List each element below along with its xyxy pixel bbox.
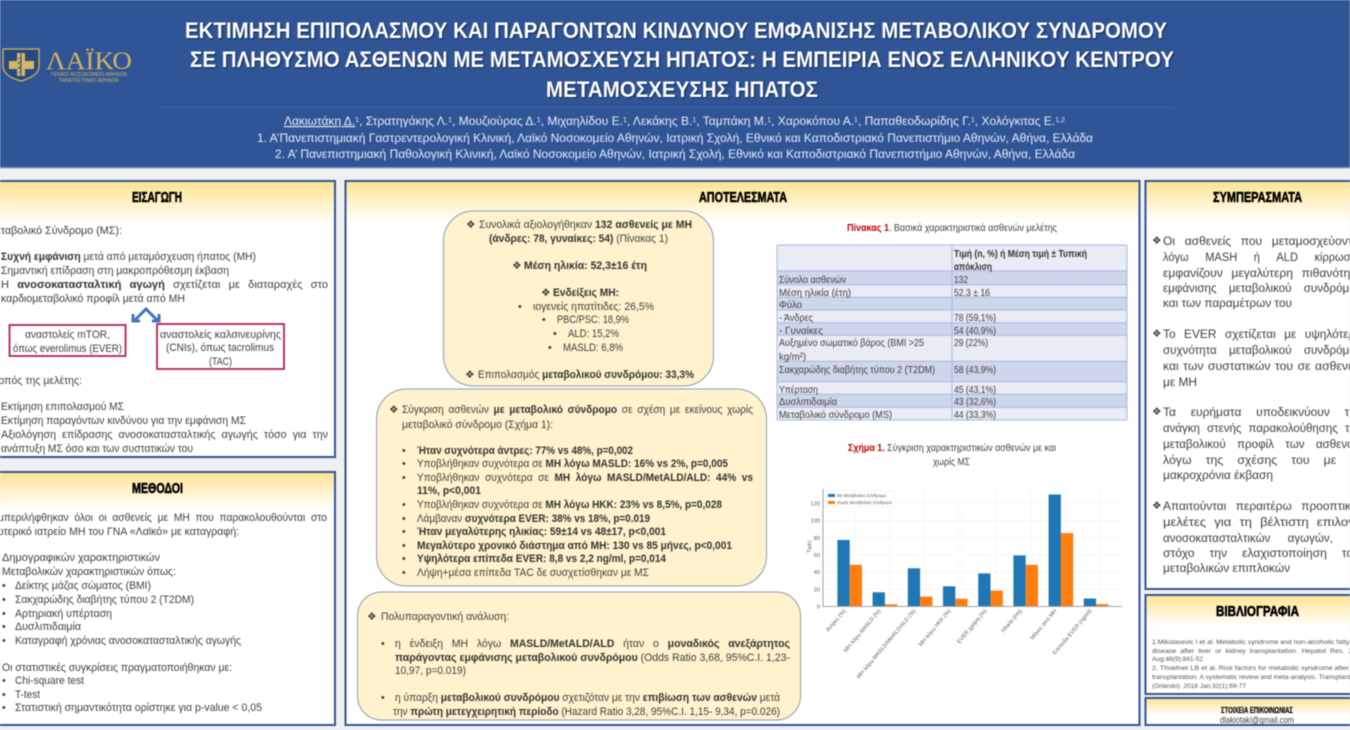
x axis labels: Ηλικία (έτη)	[1000, 608, 1024, 634]
x axis labels: ΜΗ λόγω MASLD (%)	[842, 608, 883, 654]
callout: overall cohort: (άνδρες: 78, γυναίκες: 54) (Πίνακας 1)	[489, 233, 668, 245]
list: statistics: Οι στατιστικές συγκρίσεις πραγματοποιήθηκαν με:	[2, 662, 232, 674]
table row labels: Μεταβολικό σύνδρομο (MS)	[779, 409, 892, 421]
chart axes	[823, 489, 1122, 606]
heading: contact: ΣΤΟΙΧΕΙΑ ΕΠΙΚΟΙΝΩΝΙΑΣ	[1221, 706, 1293, 715]
callout: overall cohort: •	[553, 328, 557, 340]
logo: Laiko hospital	[3, 48, 132, 84]
callout: comparison with and without MS: •	[402, 526, 406, 538]
title	[185, 18, 1174, 102]
logo subtitle: ΓΕΝΙΚΟ ΝΟΣΟΚΟΜΕΙΟ ΑΘΗΝΩΝ	[51, 72, 127, 78]
callout: multivariate analysis: •	[381, 692, 385, 704]
text: metabolic syndrome: Η ανοσοκατασταλτική αγωγή σχετίζεται με διαταραχές στο	[1, 279, 328, 291]
callout: comparison with and without MS: Ήταν συχνότερα άντρες: 77% vs 48%, p=0,002	[417, 445, 633, 457]
references: Aug;46(9):841-52	[1152, 656, 1203, 663]
conclusion 2: ❖	[1152, 328, 1162, 340]
title: ΣΕ ΠΛΗΘΥΣΜΟ ΑΣΘΕΝΩΝ ΜΕ ΜΕΤΑΜΟΣΧΕΥΣΗ ΗΠΑΤΟΣ: Η ΕΜΠΕΙΡΙΑ ΕΝΟΣ ΕΛΛΗΝΙΚΟΥ ΚΕΝΤΡΟΥ	[190, 47, 1174, 72]
callout: overall cohort: Επιπολασμός μεταβολικού συνδρόμου: 33,3%	[478, 369, 694, 381]
box: calcineurin inhibitors: αναστολείς καλσινευρίνης	[160, 329, 281, 341]
panel: conclusions	[1146, 181, 1350, 589]
references: 1.Mikolasevic I et al. Metabolic syndrome and non-alcoholic fatty liver	[1152, 639, 1350, 646]
logo wordmark: ΛΑΪΚΟ	[46, 48, 132, 75]
callout: overall cohort: •	[518, 301, 522, 313]
box: mTOR inhibitors	[10, 325, 126, 356]
x axis labels: ΜΗ λόγω MASLD/MetALD/ALD (%)	[855, 608, 918, 680]
y axis ticks: 120	[811, 502, 820, 508]
heading: conclusions: ΣΥΜΠΕΡΑΣΜΑΤΑ	[1213, 189, 1302, 206]
conclusion 2: με ΜΗ	[1163, 377, 1197, 389]
conclusion 1	[1152, 235, 1350, 310]
title: ΕΚΤΙΜΗΣΗ ΕΠΙΠΟΛΑΣΜΟΥ ΚΑΙ ΠΑΡΑΓΟΝΤΩΝ ΚΙΝΔΥΝΟΥ ΕΜΦΑΝΙΣΗΣ ΜΕΤΑΒΟΛΙΚΟΥ ΣΥΝΔΡΟΜΟΥ	[185, 18, 1167, 43]
callout: overall cohort: ❖	[465, 369, 475, 381]
table values: 78 (59,1%)	[954, 313, 996, 324]
list: metabolic characteristics: Δυσλιπιδαιμία	[15, 621, 81, 633]
conclusion 3: Τα ευρήματα υποδεικνύουν την	[1163, 407, 1350, 419]
callout: comparison with and without MS: •	[402, 445, 406, 457]
table header: απόκλιση	[954, 262, 992, 273]
conclusion 2	[1152, 328, 1350, 389]
conclusion 1: εμφανίζουν μεγαλύτερη πιθανότητα	[1163, 268, 1350, 280]
text: study aim: ανάπτυξη ΜΣ όσο και των συστατικών του	[1, 443, 193, 455]
contact email: dlakiotaki@gmail.com	[1220, 715, 1294, 725]
box: calcineurin inhibitors: (TAC)	[209, 356, 232, 368]
table values: 132	[954, 275, 968, 286]
logo subtitle	[51, 72, 127, 84]
callout: overall cohort: Συνολικά αξιολογήθηκαν 132 ασθενείς με ΜΗ	[479, 219, 692, 231]
table header	[954, 249, 1087, 273]
figure title: χωρίς ΜΣ	[933, 456, 970, 468]
x axis labels: Άντρες (%)	[825, 608, 848, 633]
table values: 29 (22%)	[954, 338, 988, 349]
box: mTOR inhibitors: όπως everolimus (EVER)	[13, 343, 122, 355]
text: inclusion: Δημογραφικών χαρακτηριστικών	[2, 552, 160, 564]
y axis ticks: 80	[814, 536, 820, 542]
list: metabolic characteristics: Αρτηριακή υπέρταση	[15, 608, 112, 620]
table values: 45 (43,1%)	[954, 385, 996, 396]
text: inclusion	[0, 512, 327, 578]
authors and affiliations: 1. Α’Πανεπιστημιακή Γαστρεντερολογική Κλινική, Λαϊκό Νοσοκομείο Αθηνών, Ιατρική Σχολή, Εθνικό και Καποδιστριακό Πανεπιστήμιο Αθηνών, Αθήνα, Ελλάδα	[257, 131, 1093, 145]
list: metabolic characteristics	[2, 580, 241, 647]
list: metabolic characteristics: •	[2, 594, 6, 606]
references: disease after liver or kidney transplantation. Hepatol Res. 2016	[1152, 648, 1350, 655]
conclusion 4: στόχο την ελαχιστοποίηση των	[1163, 548, 1350, 560]
bars: with metabolic syndrome	[837, 494, 1096, 606]
references	[1152, 639, 1350, 690]
bars: without metabolic syndrome	[850, 533, 1108, 606]
callout: overall cohort: ALD: 15,2%	[568, 328, 619, 340]
authors and affiliations	[257, 114, 1093, 161]
conclusion 1: ❖	[1152, 235, 1162, 247]
list: metabolic characteristics: Δείκτης μάζας σώματος (ΒΜΙ)	[15, 580, 151, 592]
callout: comparison with and without MS: 11%, p<0,001	[417, 485, 481, 497]
callout: overall cohort: Ενδείξεις ΜΗ:	[553, 287, 619, 299]
callout: overall cohort: PBC/PSC: 18,9%	[557, 314, 629, 326]
text: study aim: Εκτίμηση παραγόντων κινδύνου για την εμφάνιση ΜΣ	[1, 415, 246, 427]
list: statistics	[2, 662, 262, 714]
list: metabolic characteristics: Καταγραφή χρόνιας ανοσοκατασταλτικής αγωγής	[15, 635, 241, 647]
text: study aim	[0, 375, 328, 455]
callout: overall cohort: ιογενείς ηπατίτιδες: 26,5%	[533, 301, 654, 313]
x axis labels: EVER χρήση (%)	[956, 608, 989, 645]
callout: comparison with and without MS: Μεγαλύτερο χρονικό διάστημα από ΜΗ: 130 vs 85 μήνες, p<0,001	[417, 540, 732, 552]
text: metabolic syndrome: Σημαντική επίδραση στη μακροπρόθεσμη έκβαση	[1, 265, 229, 277]
table values: 58 (43,9%)	[954, 365, 996, 376]
conclusion 3: ❖	[1152, 406, 1162, 418]
conclusion 4: μεταβολικών επιπλοκών	[1163, 563, 1290, 575]
conclusion 2: Το EVER σχετίζεται με υψηλότερη	[1163, 329, 1350, 341]
callout: multivariate analysis: η ύπαρξη μεταβολικού συνδρόμου σχετιζόταν με την επιβίωση των ασθενών μετά	[395, 692, 780, 704]
callout: comparison with and without MS	[376, 389, 766, 586]
authors and affiliations: 2. Α’ Πανεπιστημιακή Παθολογική Κλινική, Λαϊκό Νοσοκομείο Αθηνών, Ιατρική Σχολή, Εθνικό και Καποδιστριακό Πανεπιστήμιο Αθηνών, Αθήνα, Ελλάδα	[275, 147, 1075, 161]
references: (Orlando). 2018 Jan;32(1):69-77	[1152, 683, 1246, 690]
table title: Πίνακας 1. Βασικά χαρακτηριστικά ασθενών μελέτης	[847, 222, 1057, 234]
x axis labels: Μήνες από ΜΗ	[1029, 608, 1059, 641]
callout: comparison with and without MS: •	[402, 499, 406, 511]
arrow: double chevron	[133, 309, 159, 321]
table row labels: Σύνολο ασθενών	[779, 274, 846, 286]
list: metabolic characteristics: •	[2, 621, 6, 633]
table header: Τιμή (n, %) ή Μέση τιμή ± Τυπική	[954, 249, 1087, 260]
table values: 52,3 ± 16	[954, 288, 990, 299]
list: statistics: •	[2, 675, 6, 687]
callout: overall cohort	[444, 211, 714, 386]
header banner	[0, 0, 1350, 168]
table row labels: Υπέρταση	[779, 384, 818, 396]
table row labels: Φύλο	[779, 299, 802, 311]
callout: comparison with and without MS: Ήταν μεγαλύτερης ηλικίας: 59±14 vs 48±17, p<0,001	[417, 526, 666, 538]
callout: comparison with and without MS: •	[402, 472, 406, 484]
text: metabolic syndrome: Συχνή εμφάνιση μετά από μεταμόσχευση ήπατος (ΜΗ)	[1, 251, 256, 263]
y axis ticks: 100	[811, 519, 820, 525]
conclusion 3	[1152, 406, 1350, 482]
y axis label: Τιμές	[806, 540, 813, 553]
text: metabolic syndrome: καρδιομεταβολικό προφίλ μετά από ΜΗ	[1, 293, 185, 305]
table row labels: - Άνδρες	[779, 313, 813, 324]
heading: introduction: ΕΙΣΑΓΩΓΗ	[132, 189, 182, 206]
chart legend: Χωρίς Μεταβολικό Σύνδρομο	[837, 500, 893, 505]
table values	[954, 275, 996, 421]
conclusion 4: μελέτες για τη βέλτιστη επιλογή	[1163, 517, 1350, 529]
chart legend	[826, 491, 895, 507]
table row labels: Μέση ηλικία (έτη)	[779, 287, 851, 299]
table row labels: kg/m²)	[779, 352, 806, 363]
callout: overall cohort: Μέση ηλικία: 52,3±16 έτη	[524, 260, 647, 272]
panel: bibliography	[1146, 595, 1350, 694]
callout: multivariate analysis: 10,97, p=0.019)	[395, 665, 466, 677]
table row labels: Αυξημένο σωματικό βάρος (BMI >25	[779, 337, 924, 349]
conclusion 4	[1152, 500, 1350, 575]
table values: 54 (40,9%)	[954, 326, 996, 337]
box: calcineurin inhibitors: (CNIs), όπως tacrolimus	[166, 342, 274, 354]
callout: multivariate analysis: Πολυπαραγοντική ανάλυση:	[381, 611, 509, 623]
icon: shield with cross	[3, 49, 39, 81]
panel: results	[346, 181, 1140, 725]
conclusion 4: ❖	[1152, 500, 1162, 512]
list: statistics: T-test	[15, 689, 40, 701]
callout: multivariate analysis: την πρώτη μετεγχειρητική περίοδο (Hazard Ratio 3,28, 95%C.I. 1,15- 9,34, p=0.026)	[393, 706, 780, 718]
y axis ticks: 60	[814, 553, 820, 559]
logo subtitle: ΠΑΝΕΠΙΣΤΗΜΙΟ ΑΘΗΝΩΝ	[59, 78, 119, 84]
conclusion 4: Απαιτούνται περαιτέρω προοπτικές	[1163, 501, 1350, 513]
callout: comparison with and without MS: Υποβλήθηκαν συχνότερα σε ΜΗ λόγω ΗΚΚ: 23% vs 8,5%, p=0,028	[417, 499, 722, 511]
callout: comparison with and without MS: •	[402, 567, 406, 579]
authors and affiliations: Λακιωτάκη Δ.1, Στρατηγάκης Λ.1, Μουζιούρας Δ.1, Μιχαηλίδου Ε.1, Λεκάκης Β.1, Ταμπάκη Μ.1, Χαροκόπου Α.1, Παπαθεοδωρίδης Γ.1, Χολόγκιτας Ε.1,2	[284, 114, 1065, 128]
callout: overall cohort: ❖	[541, 287, 551, 299]
table values: 44 (33,3%)	[954, 410, 996, 421]
list: metabolic characteristics: Σακχαρώδης διαβήτης τύπου 2 (T2DM)	[15, 594, 194, 606]
box: calcineurin inhibitors	[157, 324, 284, 369]
panel: contact	[1146, 698, 1350, 725]
callout: comparison with and without MS: •	[402, 458, 406, 470]
conclusion 1: και των παραμέτρων του	[1163, 298, 1292, 310]
y axis ticks	[811, 502, 820, 610]
table values: 43 (32,6%)	[954, 397, 996, 408]
list: statistics: •	[2, 689, 6, 701]
panel: methods	[0, 472, 335, 725]
callout: multivariate analysis	[358, 592, 800, 720]
text: inclusion: Μεταβολικών χαρακτηριστικών όπως:	[2, 566, 176, 578]
callout: multivariate analysis: ❖	[367, 611, 377, 623]
x axis labels	[825, 608, 1094, 680]
x axis labels: ΜΗ λόγω ΗΚΚ (%)	[917, 608, 953, 648]
table row fills	[777, 245, 1127, 420]
table row labels: Δυσλιπιδαιμία	[779, 396, 837, 408]
callout: comparison with and without MS: •	[402, 513, 406, 525]
figure title: Σχήμα 1. Σύγκριση χαρακτηριστικών ασθενών με και	[848, 442, 1056, 454]
callout: overall cohort: ❖	[512, 260, 522, 272]
callout: overall cohort: ❖	[466, 219, 476, 231]
table: patient characteristics	[777, 245, 1127, 421]
chart legend: Με Μεταβολικό Σύνδρομο	[837, 493, 887, 498]
callout: comparison with and without MS: Σύγκριση ασθενών με μεταβολικό σύνδρομο σε σχέση με εκείνους χωρίς	[402, 404, 753, 416]
callout: comparison with and without MS: •	[402, 553, 406, 565]
references: 2. Thoefner LB et al. Risk factors for metabolic syndrome after liver	[1152, 665, 1350, 672]
list: metabolic characteristics: •	[2, 635, 6, 647]
table row labels: Σακχαρώδης διαβήτης τύπου 2 (T2DM)	[779, 364, 935, 376]
heading: results: ΑΠΟΤΕΛΕΣΜΑΤΑ	[699, 189, 787, 206]
text: metabolic syndrome	[0, 225, 328, 305]
list: statistics: Chi-square test	[15, 675, 84, 687]
title: ΜΕΤΑΜΟΣΧΕΥΣΗΣ ΗΠΑΤΟΣ	[546, 77, 818, 102]
callout: comparison with and without MS: Λάμβαναν συχνότερα EVER: 38% vs 18%, p=0.019	[417, 513, 650, 525]
bar chart: comparison of characteristics	[806, 489, 1122, 680]
conclusion 3: λόγω της σχέσης του με τη	[1163, 455, 1350, 467]
list: metabolic characteristics: •	[2, 580, 6, 592]
callout: comparison with and without MS: Λήψη+μέσα επίπεδα TAC δε συσχετίσθηκαν με ΜΣ	[417, 567, 649, 579]
callout: comparison with and without MS: Υποβλήθηκαν συχνότερα σε ΜΗ λόγω MASLD: 16% vs 2%, p=0,005	[417, 458, 728, 470]
callout: overall cohort: MASLD: 6,8%	[563, 342, 623, 354]
callout: multivariate analysis: παράγοντας εμφάνισης μεταβολικού συνδρόμου (Odds Ratio 3,68, 95%C.I. 1,23-	[395, 652, 790, 664]
y axis ticks: 0	[817, 604, 820, 610]
figure title	[848, 442, 1056, 468]
table row labels: - Γυναίκες	[779, 325, 823, 337]
box: mTOR inhibitors: αναστολείς mTOR,	[25, 329, 110, 341]
y axis ticks: 20	[814, 587, 820, 593]
heading: bibliography: ΒΙΒΛΙΟΓΡΑΦΙΑ	[1216, 603, 1299, 620]
y axis ticks: 40	[814, 570, 820, 576]
list: statistics: •	[2, 702, 6, 714]
conclusion 2: και των συστατικών του σε ασθενείς	[1163, 361, 1350, 373]
table row labels	[779, 274, 935, 421]
callout: multivariate analysis: η ένδειξη ΜΗ λόγω MASLD/MetALD/ALD ήταν ο μοναδικός ανεξάρτητος	[395, 638, 790, 650]
text: study aim: Αξιολόγηση επίδρασης ανοσοκατασταλτικής αγωγής τόσο για την	[1, 429, 328, 441]
callout: overall cohort: •	[548, 342, 552, 354]
conclusion 1: Οι ασθενείς που μεταμοσχεύονται	[1163, 236, 1350, 248]
callout: comparison with and without MS: Υποβλήθηκαν συχνότερα σε ΜΗ λόγω MASLD/MetALD/ALD: 44% vs	[417, 472, 753, 484]
callout: comparison with and without MS: ❖	[389, 404, 399, 416]
callout: comparison with and without MS: •	[402, 540, 406, 552]
callout: multivariate analysis: •	[381, 638, 385, 650]
x axis labels: Επίπεδα EVER (ng/ml)	[1052, 608, 1094, 656]
list: metabolic characteristics: •	[2, 608, 6, 620]
conclusion 3: μακροχρόνια έκβαση	[1163, 470, 1273, 482]
callout: comparison with and without MS: μεταβολικό σύνδρομο (Σχήμα 1):	[402, 419, 553, 431]
callout: comparison with and without MS: Υψηλότερα επίπεδα EVER: 8,8 vs 2,2 ng/ml, p=0,014	[417, 553, 666, 565]
callout: overall cohort: •	[542, 314, 546, 326]
panel: introduction	[0, 181, 335, 457]
heading: methods: ΜΕΘΟΔΟΙ	[132, 480, 183, 497]
list: statistics: Στατιστική σημαντικότητα ορίστηκε για p-value < 0,05	[15, 702, 262, 714]
text: study aim: Εκτίμηση επιπολασμού ΜΣ	[1, 401, 124, 413]
